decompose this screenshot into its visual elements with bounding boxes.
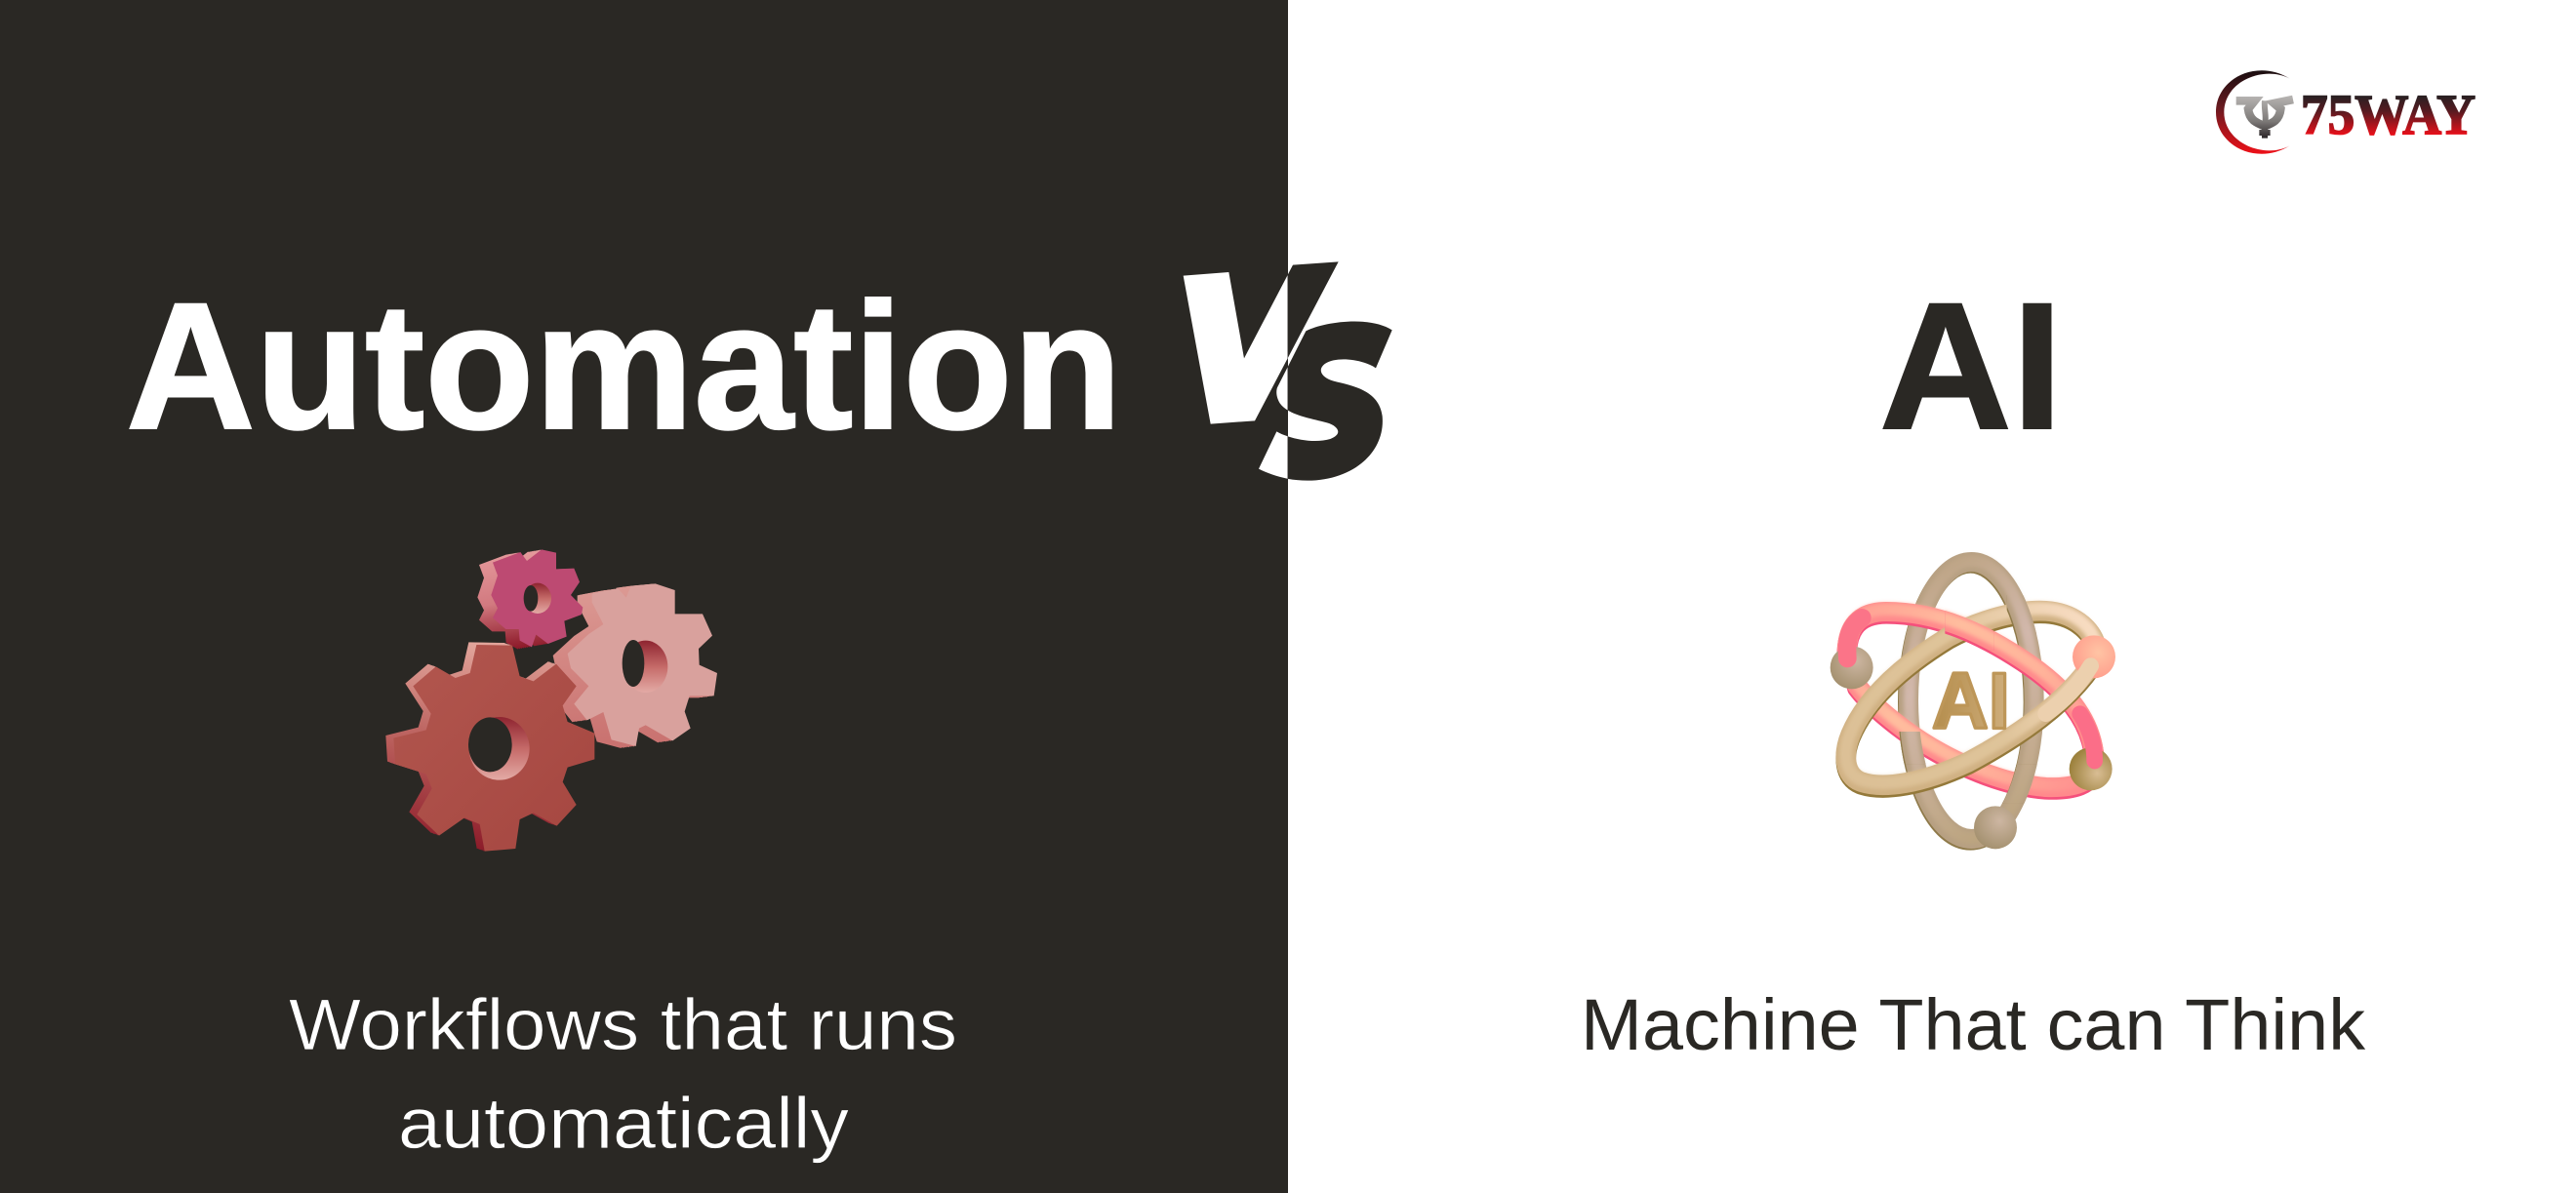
panel: AI background <box>1288 0 2576 1193</box>
atom node: peach upper right <box>2073 635 2115 678</box>
caption: automation: Workflows that runs <box>289 984 957 1065</box>
caption: automation: automatically <box>398 1083 849 1164</box>
left node with pink tube end <box>1831 617 1873 689</box>
caption: AI: Machine That can Think <box>1581 984 2366 1065</box>
panel: automation background <box>0 0 1288 1193</box>
heading: Automation: Automation <box>126 266 1122 467</box>
ring: tan <box>1846 609 2096 787</box>
ring overlap: taupe over tan <box>2006 595 2037 634</box>
ring overlap: pink over tan <box>1945 610 1994 651</box>
gear: large red <box>385 642 594 852</box>
ring: vertical taupe <box>1908 561 2035 841</box>
icon: AI atom <box>1831 561 2115 849</box>
VS badge split across panels <box>1184 261 1392 481</box>
logo: 75WAY <box>2216 70 2475 154</box>
gear: light pink <box>553 583 717 748</box>
caption: automation <box>289 984 957 1164</box>
logo crescent <box>2216 70 2290 154</box>
pink tube end on lower-right node <box>2080 714 2095 761</box>
gear: small magenta <box>477 549 583 650</box>
logo trident mark <box>2236 99 2293 139</box>
ring overlap: taupe over pink right <box>2002 764 2037 804</box>
tan tube end over peach node <box>2046 666 2091 714</box>
icon text: AI: AI <box>1932 657 2010 746</box>
ring: pink <box>1847 610 2095 789</box>
logo wordmark: 75WAY <box>2301 83 2475 146</box>
atom nodes: lower right and bottom <box>1974 747 2113 849</box>
ring overlap: taupe over pink left <box>1899 732 1926 765</box>
heading: AI: AI <box>1879 266 2063 467</box>
icon: three 3D gears <box>385 549 717 852</box>
